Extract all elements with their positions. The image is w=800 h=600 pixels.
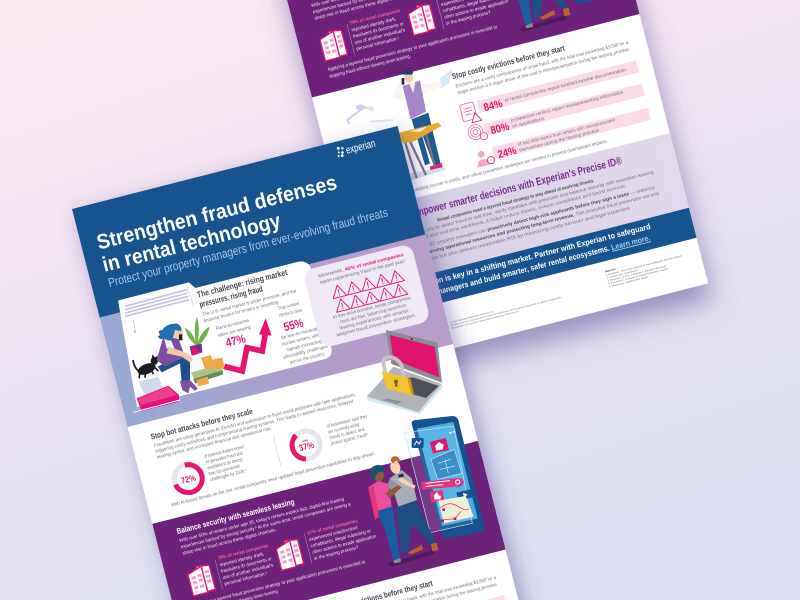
panel: 45% of rental companies card: adaptive fraud prevention strategies. xyxy=(336,312,417,339)
title: Strengthen fraud defenses xyxy=(94,171,339,254)
section: balance security with seamless leasing: 67% of rental companies xyxy=(307,518,359,537)
illustration: desk lamp xyxy=(347,104,393,124)
chart: 37% donut: 37% xyxy=(298,440,315,453)
section: seamless leasing (continued) xyxy=(284,0,639,97)
stat bar 24%: of bad debt stems from renters who misrepresented xyxy=(517,117,616,148)
section: balance security with seamless leasing: sharp rise in fraud across these digital channels. xyxy=(182,527,277,557)
stat bar 80%: on applications. xyxy=(512,116,546,130)
stat: 55%: across the country. xyxy=(289,351,325,366)
section: balance security with seamless leasing: personal information.¹ xyxy=(224,571,268,587)
section: seamless leasing (continued): personal information.¹ xyxy=(356,36,400,52)
footer: legal and sources xyxy=(447,250,686,330)
section: balance security with seamless leasing: or the leasing process? xyxy=(313,545,360,562)
section: Precise ID: Using flexible analytics and real-time workflows, it helps reduce losses, ensure compliance and boost revenue. xyxy=(376,183,627,253)
panel: 45% of rental companies card: leasing experiences with smarter, xyxy=(339,308,410,331)
footer: legal and sources: 4 Experian, Future of fraud forecast report xyxy=(608,267,669,286)
section: balance security with seamless leasing: reported identity theft, xyxy=(219,551,265,568)
footer: legal and sources: 5 National apartment data xyxy=(609,275,649,288)
money xyxy=(191,355,225,386)
stat: 47%: Rent-to-income xyxy=(215,318,250,332)
illustration: woman, cat, plant, money and rising arrow xyxy=(124,287,272,412)
section: stop bot attacks: protect against, fraud? xyxy=(330,432,369,447)
stat bar 24% xyxy=(492,108,652,162)
section: stop bot attacks: AI-generated fraud and xyxy=(205,450,244,466)
stat bar 84%: of rental companies report falsified income documentation xyxy=(504,67,627,104)
section: stop bot attacks: triggering costly workflows and compromising leasing systems. This leads to wasted resources, delayed xyxy=(155,399,354,455)
panel: the challenge card: financial burden for renters is mounting. xyxy=(203,299,280,324)
chart: 37% donut: only xyxy=(301,438,309,443)
footer: legal and sources: 2 Experian research xyxy=(606,269,639,280)
stat bar 80%: 80% xyxy=(489,121,511,137)
illustration: couple's feet and phone base on back sheet xyxy=(500,0,617,32)
small laptop xyxy=(138,377,163,395)
section: balance security with seamless leasing: With over 50% of renters under age 35, today's renters expect fast, digital-first leasing xyxy=(179,496,345,544)
footer: legal and sources: Other product and company names may be trademarks of their owners. xyxy=(451,310,520,330)
icon: buildings left xyxy=(186,563,216,596)
stat: 47%: 47% xyxy=(224,331,247,350)
section: stop bot attacks: deepfakes to be among xyxy=(207,457,243,472)
section: Precise ID: safeguards communities but also delivers measurable ROI by minimizing costly turnover and legal expenses. xyxy=(381,205,632,274)
logo: experian xyxy=(335,138,377,159)
woman xyxy=(157,324,198,393)
panel: 45% of rental companies card: report experiencing fraud in the past year! xyxy=(319,258,406,286)
subtitle: Protect your property managers from ever-evolving fraud threats xyxy=(107,205,389,290)
section: balance security with seamless leasing: 79% of rental companies xyxy=(217,543,269,562)
section: stop bot attacks: leasing cycles, and increased financial and operational risk. xyxy=(156,426,272,461)
icon: buildings right xyxy=(275,538,304,570)
chart: 72% donut: 72% xyxy=(180,472,197,486)
panel: the challenge card xyxy=(110,252,334,407)
section: stop bot attacks: of businesses said they xyxy=(326,413,369,430)
section: balance security with seamless leasing xyxy=(152,441,506,600)
plant xyxy=(185,317,210,356)
section: Precise ID xyxy=(342,133,689,291)
section: balance security with seamless leasing: fraudulent ID documents or xyxy=(221,556,273,575)
section: stop bot attacks: With AI-based threats on the rise, rental companies need updated fraud prevention capabilities to stay ahead. xyxy=(171,451,376,509)
section: stop bot attacks: challenges by 2026.⁴ xyxy=(210,468,248,483)
panel: 45% of rental companies card: must act fast, balancing seamless xyxy=(340,302,407,325)
heading: challenge: The challenge: rising market xyxy=(196,267,289,300)
footer: legal and sources: Sources xyxy=(605,267,617,273)
stat: 55%: signals increasing xyxy=(286,339,322,353)
chart: 72% donut xyxy=(171,462,205,496)
footer: legal and sources: 3 Harvard JCHS, America's Rental Housing xyxy=(607,265,667,283)
section: seamless leasing (continued): reported identity theft, xyxy=(351,16,397,33)
panel: 45% of rental companies card: In this environment, rental companies xyxy=(332,295,412,321)
section: balance security with seamless leasing: other actions to evade application xyxy=(312,533,377,556)
section: seamless leasing (continued): fraudulent ID documents or xyxy=(353,21,405,40)
footer: legal and sources: All rights reserved. Experian and the Experian trademarks used herein are trademarks or registered trademarks. xyxy=(450,296,563,327)
section: stop costly evictions: Stop costly evictions before they start xyxy=(451,44,566,81)
section: balance security with seamless leasing: cohabitants, illegal subletting or xyxy=(310,528,372,549)
footer: legal and sources: © 2025 Experian Information Solutions, Inc. xyxy=(450,310,495,324)
header: title band xyxy=(72,126,425,318)
section: Precise ID: Precise ID® empowers you to detect fraud in real time, verify identities with precision and balance security with seamless leasing. xyxy=(374,168,656,246)
illustration: couple with oversized phone xyxy=(368,416,485,567)
stat: 55%: affordability challenges xyxy=(283,344,329,361)
section: seamless leasing (continued): stopping fraud without slowing down leasing. xyxy=(329,53,412,80)
panel: back sheet, lower half of the document xyxy=(278,0,708,367)
banner: call to action: Fraud protection is key in a shifting market. Partner with Experian to safeguard xyxy=(387,222,651,298)
stat: 55%: That number xyxy=(277,301,301,312)
section: stop bot attacks: are currently using xyxy=(327,422,360,436)
section: Precise ID: Empower smarter decisions with Experian's Precise ID® xyxy=(410,155,623,220)
stat bar 80% xyxy=(483,84,645,139)
section: balance security with seamless leasing: experienced unauthorized xyxy=(308,525,359,543)
banner: call to action xyxy=(361,208,697,321)
section: stop bot attacks xyxy=(150,380,378,509)
panel: hero background xyxy=(100,235,453,427)
section: stop bot attacks: GenAI to detect, and xyxy=(329,427,366,441)
panel: 45% of rental companies card: Meanwhile, 45% of rental companies xyxy=(318,252,405,280)
section: stop bot attacks: Stop bot attacks before they scale xyxy=(150,407,254,441)
illustration: man at standing desk with phone xyxy=(393,69,452,181)
rising arrow xyxy=(224,318,272,371)
section: stop bot attacks: their top operational xyxy=(208,464,241,477)
stat: 55% xyxy=(271,297,331,367)
section: seamless leasing (continued): or the leasing process? xyxy=(445,10,492,27)
stat: 47%: ratios are nearing xyxy=(217,325,252,339)
section: Precise ID: Rental companies need a layered fraud strategy to stay ahead of evolving threats. xyxy=(437,178,595,224)
section: stop bot attacks: of business leaders expect xyxy=(204,444,245,460)
panel: front sheet, upper half of the document xyxy=(72,126,526,600)
section: stop costly evictions: Misstating income is costly, and robust prevention strategies are needed to prevent downstream impacts. xyxy=(409,138,609,195)
icon: fingerprint with shield xyxy=(466,122,488,143)
section: stop costly evictions: single eviction.5 A major driver of this cost is misrepresentation during the leasing process. xyxy=(457,47,631,96)
section: stop costly evictions: Evictions are a costly consequence of rental fraud, with the total cost exceeding $3,500 for a xyxy=(455,40,629,90)
panel: 45% of rental companies card xyxy=(302,243,431,349)
stat: 47% xyxy=(215,318,255,351)
section: Precise ID: With Experian's Precise ID, property managers can proactively detect high-risk applicants before they sign a lease — reducing xyxy=(378,185,656,261)
panel: the challenge card: pressures, rising fraud xyxy=(198,284,264,309)
section: Precise ID: rental inefficiency, preserving operational resources and protecting long-term revenue. This proactive fraud prevention not only xyxy=(380,191,661,268)
icon: document with warning xyxy=(459,101,482,125)
panel: the challenge card: The U.S. rental market is under pressure, and the xyxy=(202,288,297,318)
stat: 55%: for low-to-moderate xyxy=(281,325,321,341)
stat bar 24%: 24% xyxy=(497,145,518,161)
section: stop bot attacks: Fraudsters are using generative AI (GenAI) and automation to flood rental platforms with fake applications, xyxy=(153,392,356,449)
pink box xyxy=(133,386,180,412)
section: balance security with seamless leasing: Balance security with seamless leasing xyxy=(176,497,295,536)
section: seamless leasing (continued): Applying a layered fraud prevention strategy to your application processes is essential to xyxy=(327,24,498,73)
chart: 37% donut xyxy=(285,424,327,466)
icons: warning triangles xyxy=(330,269,408,312)
section: balance security with seamless leasing: experiences backed by strong security.² At the same time, rental companies are seeing a xyxy=(180,501,352,550)
window blinds xyxy=(124,287,194,333)
stat bar 84%: 84% xyxy=(482,98,504,114)
title: in rental technology xyxy=(100,209,283,277)
stat: 55%: income renters, which xyxy=(281,331,324,348)
stat bar 24%: themselves during the leasing process xyxy=(519,128,600,154)
illustration: laptop with padlock xyxy=(367,330,443,414)
section: seamless leasing (continued): 79% of rental companies xyxy=(349,8,401,27)
stat bar 80%: prospective renters report misrepresenting information xyxy=(510,89,624,124)
section: seamless leasing (continued): use of another individual's xyxy=(354,27,407,46)
stat: 55%: climbs to near xyxy=(278,307,303,319)
logo: experian: experian xyxy=(345,138,377,157)
banner: call to action: your property managers and build smarter, safer rental ecosystems. Learn more. xyxy=(389,233,651,308)
cat xyxy=(133,354,158,378)
stat: 55%: 55% xyxy=(282,316,305,334)
icon: person with shield xyxy=(474,148,495,168)
stat bar 84% xyxy=(477,60,639,115)
section: stop costly evictions xyxy=(383,27,654,195)
footer: legal and sources: 1 Experian, The state of fraud in the multifamily industry report xyxy=(606,255,682,277)
section: balance security with seamless leasing: use of another individual's xyxy=(222,562,275,581)
